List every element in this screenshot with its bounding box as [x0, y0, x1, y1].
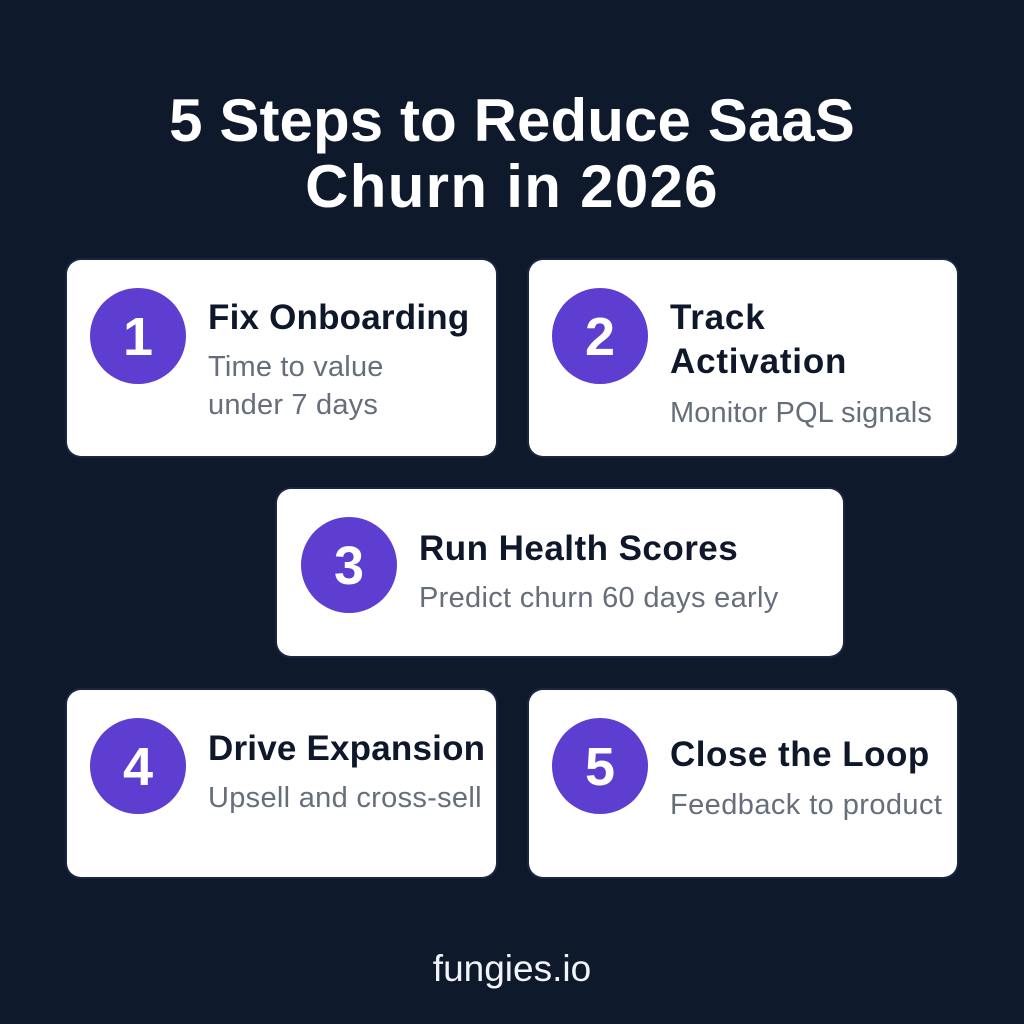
- icon: number 4: [90, 718, 186, 814]
- title: [169, 87, 855, 220]
- heading: close the loop: Close the Loop: [670, 735, 930, 774]
- title: Churn in 2026: [305, 153, 719, 220]
- text: step 1 description: under 7 days: [208, 389, 378, 421]
- icon: number 1: [90, 288, 186, 384]
- footer: brand: fungies.io: [433, 948, 591, 989]
- heading: drive expansion: Drive Expansion: [208, 729, 485, 768]
- text: step 1 description: [208, 351, 384, 421]
- heading: run health scores: Run Health Scores: [419, 529, 738, 568]
- text: step 2 description: Monitor PQL signals: [670, 397, 932, 429]
- icon: number 4: 4: [123, 737, 153, 797]
- icon: number 5: 5: [585, 737, 615, 797]
- icon: number 1: 1: [123, 307, 153, 367]
- panel: step 3: [277, 489, 843, 656]
- text: step 5 description: Feedback to product: [670, 789, 942, 821]
- icon: number 5: [552, 718, 648, 814]
- panel: step 5: [529, 690, 957, 877]
- title: 5 Steps to Reduce SaaS: [169, 87, 855, 154]
- icon: number 3: [301, 517, 397, 613]
- icon: number 2: [552, 288, 648, 384]
- icon: number 3: 3: [334, 536, 364, 596]
- panel: step 1: [67, 260, 496, 456]
- text: step 4 description: Upsell and cross-sell: [208, 782, 482, 814]
- panel: step 4: [67, 690, 496, 877]
- heading: track activation: [670, 298, 847, 381]
- icon: number 2: 2: [585, 307, 615, 367]
- panel: step 2: [529, 260, 957, 456]
- heading: track activation: Track: [670, 298, 765, 337]
- heading: fix onboarding: Fix Onboarding: [208, 298, 469, 337]
- text: step 1 description: Time to value: [208, 351, 384, 383]
- text: step 3 description: Predict churn 60 days early: [419, 582, 778, 614]
- heading: track activation: Activation: [670, 342, 847, 381]
